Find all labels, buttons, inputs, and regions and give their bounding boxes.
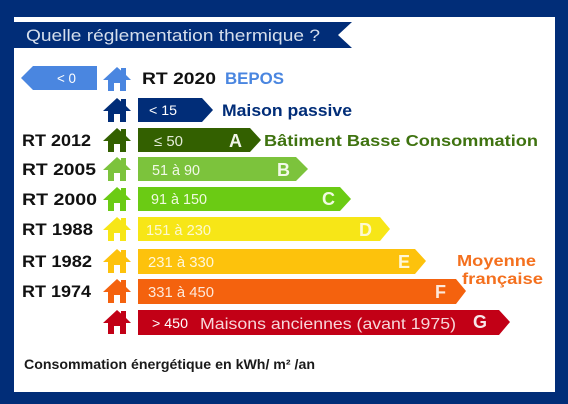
icon: house orange (103, 279, 131, 303)
icon: house blue (103, 67, 131, 91)
row: Maison passive (103, 98, 352, 122)
bar: D: 151 à 230 (146, 223, 211, 239)
footnote: unit: Consommation énergétique en kWh/ m² /an (24, 356, 315, 372)
icon: house light green (103, 157, 131, 181)
label: RT 2020: RT 2020 (142, 69, 216, 88)
bar: A: A (229, 131, 242, 151)
row: RT 1974 F (22, 279, 466, 304)
bar: F (138, 279, 466, 304)
title banner (14, 22, 352, 48)
bar: G: G (473, 312, 487, 332)
label: Bâtiment Basse Consommation: Bâtiment Basse Consommation (264, 133, 538, 150)
icon: house dark green (103, 128, 131, 152)
icon: house yellow (103, 217, 131, 241)
bar: G (138, 310, 510, 335)
bar: D (138, 217, 390, 241)
bar: below 0 (21, 66, 97, 90)
row: RT 1988 D (22, 217, 390, 241)
bar: E: E (398, 252, 410, 272)
label: RT 2000: RT 2000 (22, 190, 97, 209)
bar: B: B (277, 160, 290, 180)
row: RT 1982 E (22, 249, 426, 274)
bar: G: > 450 (152, 315, 188, 331)
icon: house red (103, 310, 131, 334)
bar: G: Maisons anciennes (avant 1975) (200, 316, 456, 333)
bar: C (138, 187, 351, 211)
bar: below 0: < 0 (57, 70, 76, 86)
bar: B (138, 157, 308, 181)
bar: C: C (322, 189, 335, 209)
bar: C: 91 à 150 (151, 192, 207, 208)
bar: E (138, 249, 426, 274)
label: RT 2005: RT 2005 (22, 160, 96, 179)
title banner: Quelle réglementation thermique ? (26, 27, 320, 45)
row: RT 2005 B (22, 157, 308, 181)
row: G (103, 310, 510, 335)
icon: house bright green (103, 187, 131, 211)
label: Maison passive: Maison passive (222, 102, 352, 120)
callout: Moyenne française: française (462, 271, 543, 288)
label: RT 1982: RT 1982 (22, 252, 92, 271)
icon: house amber (103, 249, 131, 273)
row: RT 2012 A (22, 128, 538, 152)
label: BEPOS: BEPOS (225, 69, 284, 88)
bar: B: 51 à 90 (152, 163, 200, 179)
bar: under 15: < 15 (149, 102, 177, 118)
label: RT 1974: RT 1974 (22, 282, 92, 301)
callout: Moyenne française (457, 253, 543, 288)
label: RT 1988: RT 1988 (22, 220, 93, 239)
row: RT 2020 BEPOS (21, 66, 284, 91)
label: RT 2012: RT 2012 (22, 131, 91, 150)
bar: A: ≤ 50 (154, 134, 183, 150)
bar: D: D (359, 220, 372, 240)
bar: A (138, 128, 261, 152)
bar: E: 231 à 330 (148, 255, 214, 271)
bar: under 15 (138, 98, 213, 122)
icon: house navy (103, 98, 131, 122)
bar: F: F (435, 282, 446, 302)
bar: F: 331 à 450 (148, 285, 214, 301)
callout: Moyenne française: Moyenne (457, 253, 536, 270)
row: RT 2000 C (22, 187, 351, 211)
